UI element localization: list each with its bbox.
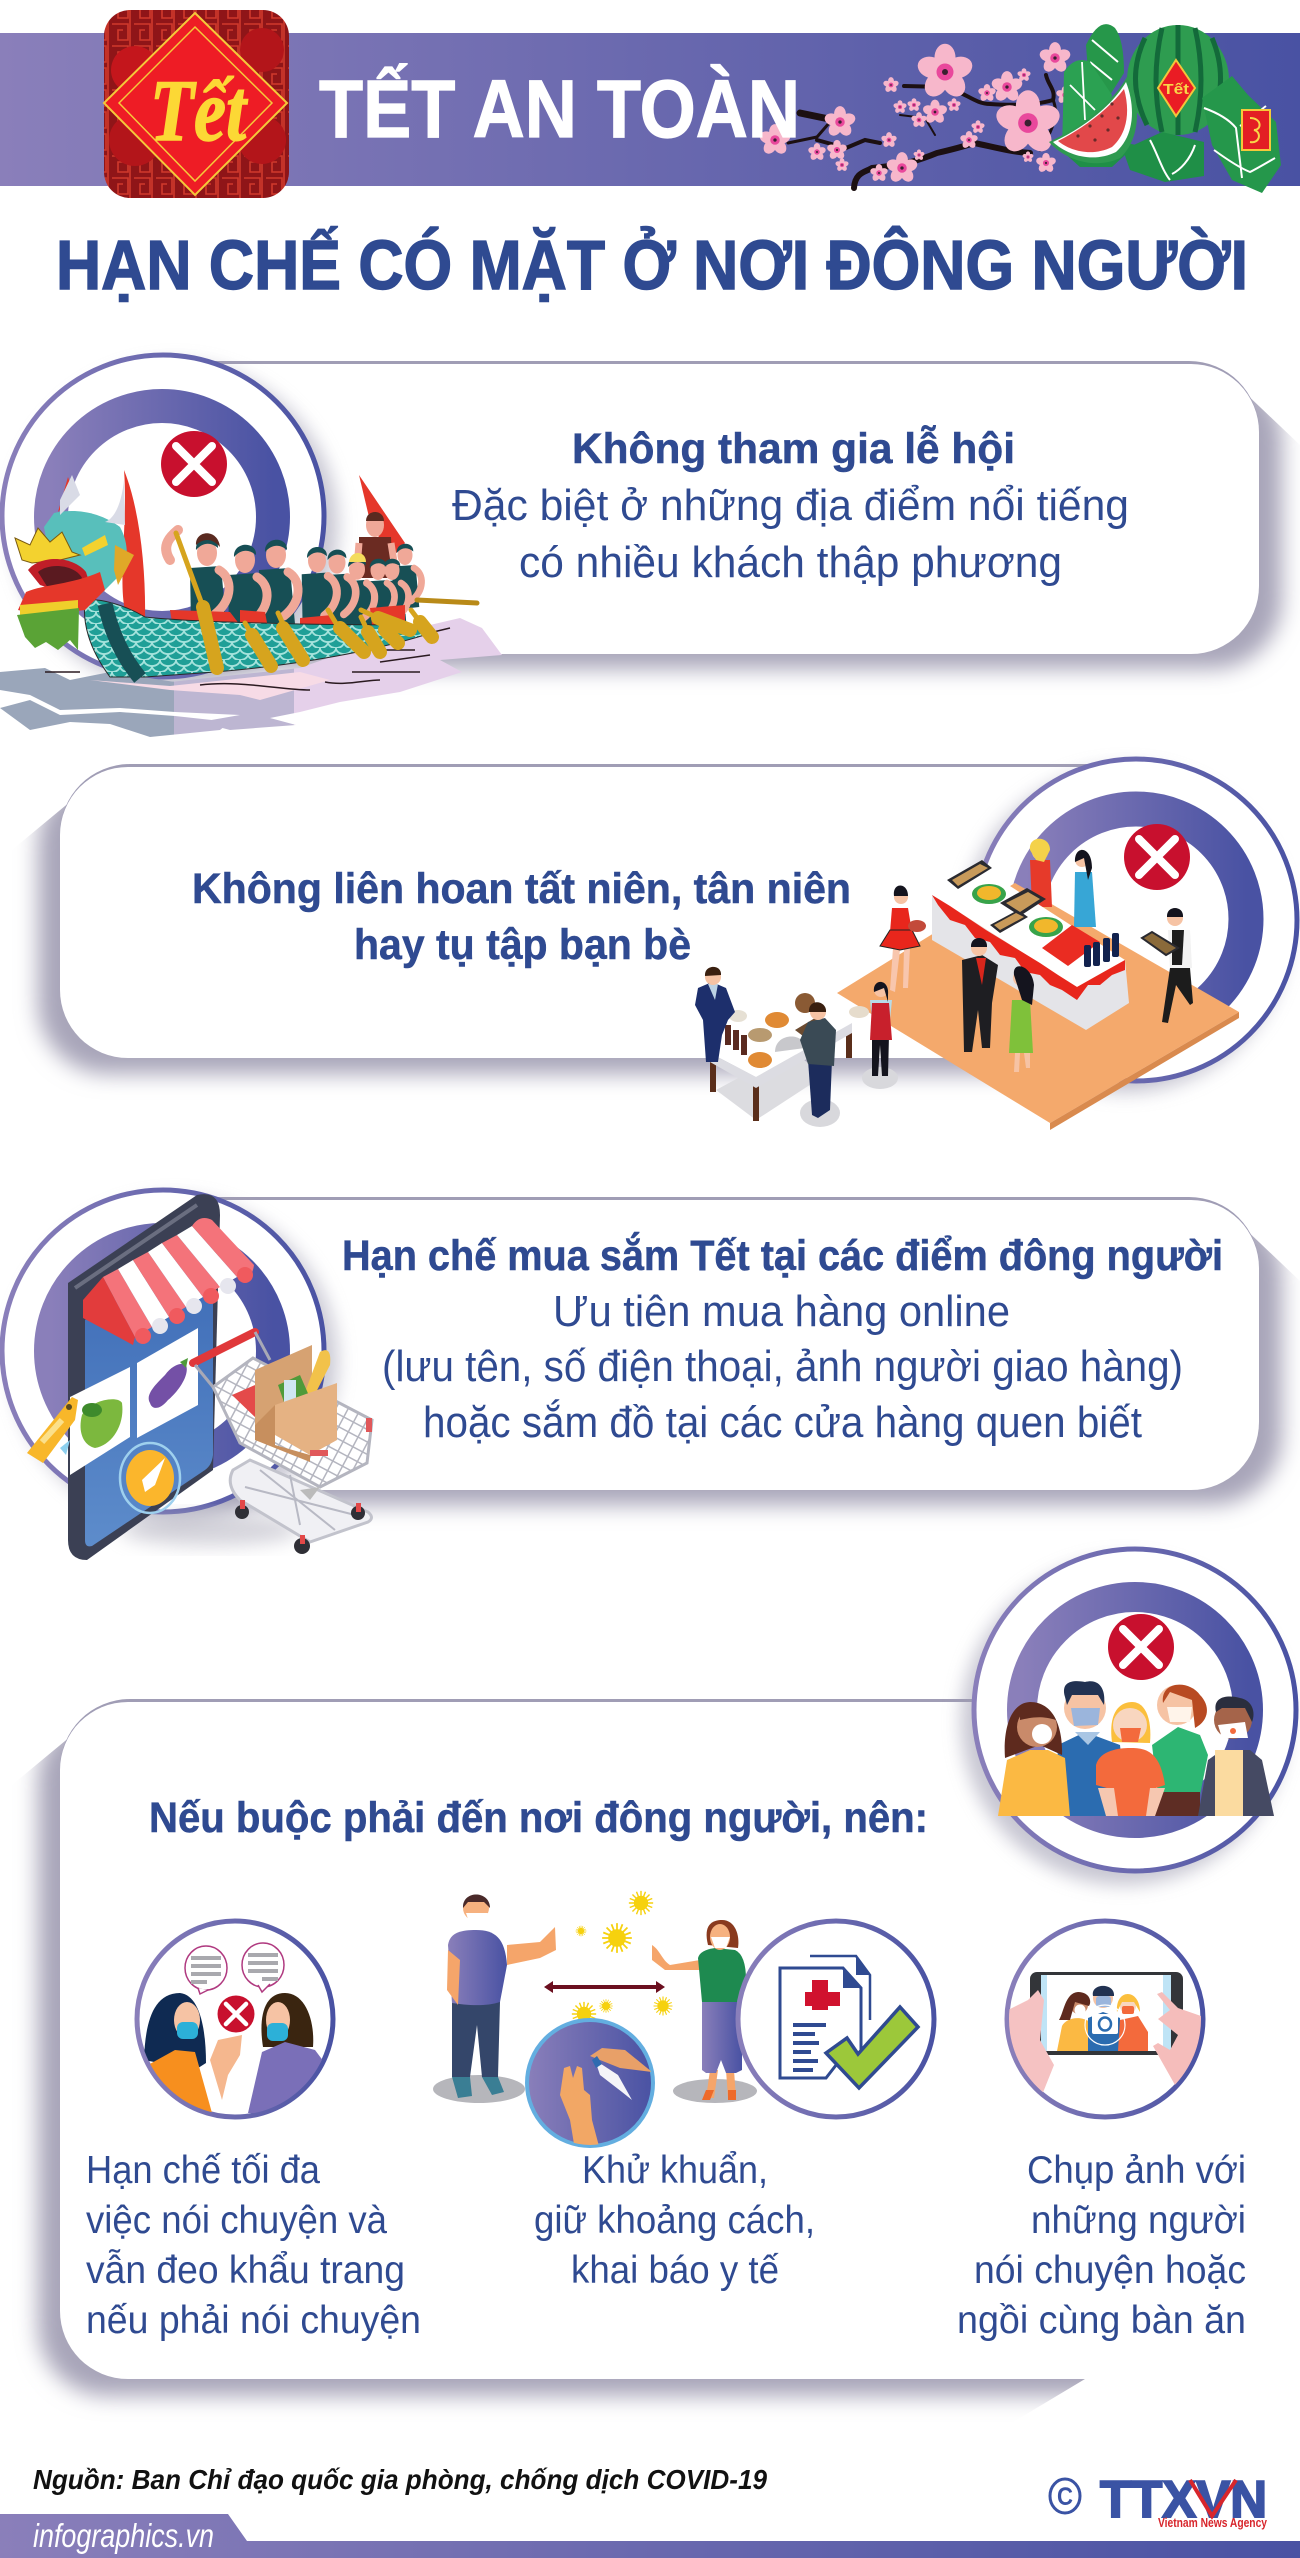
text block: no talking advice: nếu phải nói chuyện [86, 2299, 421, 2342]
illustration: woman in green dress [1009, 966, 1034, 1072]
dragon hull [84, 600, 434, 677]
icon: medical declaration [738, 1921, 934, 2117]
text block: photo advice [957, 2149, 1246, 2342]
text block: no talking advice: vẫn đeo khẩu trang [86, 2249, 405, 2292]
text block: festivals: Đặc biệt ở những địa điểm nổi tiếng [452, 481, 1129, 530]
text block: shopping: Ưu tiên mua hàng online [553, 1287, 1010, 1336]
icon: no talking [137, 1921, 333, 2117]
icon: plum blossom branch [758, 42, 1075, 188]
text block: festivals: Không tham gia lễ hội [572, 424, 1015, 473]
panel: shopping [2, 1190, 1282, 1560]
illustration: waitress [849, 982, 898, 1089]
text block: festivals [452, 424, 1129, 587]
illustration: man in black suit [962, 938, 998, 1052]
dragon head [44, 511, 127, 600]
icon: Tet lunar calendar badge: Tết [150, 63, 248, 160]
product cards [70, 1328, 198, 1475]
text block: photo advice: những người [1031, 2199, 1246, 2242]
illustration: man in navy suit [695, 967, 735, 1062]
icon: hand sanitizing [527, 2020, 653, 2150]
text block: photo advice: ngồi cùng bàn ăn [957, 2299, 1246, 2342]
text block: disinfect advice [534, 2149, 815, 2292]
banner: header band [0, 10, 1300, 198]
text block: parties: hay tụ tập bạn bè [354, 921, 691, 969]
text block: shopping: Hạn chế mua sắm Tết tại các điểm đông người [342, 1231, 1223, 1280]
panel: if you must go to crowded places [38, 1549, 1300, 2396]
text block: shopping: (lưu tên, số điện thoại, ảnh người giao hàng) [382, 1342, 1183, 1391]
speech bubbles [185, 1943, 284, 1994]
source line: Nguồn: Ban Chỉ đạo quốc gia phòng, chống dịch COVID-19 [33, 2464, 767, 2495]
website label: infographics.vn [33, 2517, 214, 2554]
text block: parties [192, 865, 851, 969]
logo: TTXVN: C [1057, 2483, 1073, 2511]
shop awning [83, 1218, 254, 1345]
illustration: woman in red dress [1030, 839, 1052, 907]
logo: TTXVN: Vietnam News Agency [1158, 2515, 1268, 2530]
document back [810, 1956, 870, 2020]
text block: shopping: hoặc sắm đồ tại các cửa hàng quen biết [423, 1398, 1142, 1447]
title: Tet an toan: TẾT AN TOÀN [319, 64, 800, 155]
text block: shopping [342, 1231, 1223, 1447]
icon: ring with X [2, 355, 338, 689]
illustration: party floor [837, 883, 1239, 1130]
illustration: waiter [1142, 908, 1193, 1023]
logo: TTXVN: TTXVN [1100, 2471, 1267, 2529]
paddles [176, 533, 477, 668]
icon: water [0, 618, 502, 737]
panel: festivals [0, 355, 1282, 737]
price tag [27, 1397, 78, 1463]
text block: no talking advice [86, 2149, 421, 2342]
icon: dragon boat [15, 470, 477, 678]
text block: disinfect advice: giữ khoảng cách, [534, 2199, 815, 2242]
person: blue sweater [1055, 1681, 1128, 1816]
text block: photo advice: Chụp ảnh với [1027, 2149, 1246, 2192]
illustration: woman keeping distance [652, 1920, 757, 2103]
person: orange shirt [1096, 1702, 1165, 1816]
arrow: distance [544, 1981, 665, 1993]
text block: photo advice: nói chuyện hoặc [974, 2249, 1246, 2292]
text block: no talking advice: Hạn chế tối đa [86, 2149, 320, 2192]
text block: festivals: có nhiều khách thập phương [519, 538, 1062, 587]
illustration: woman in blue dress [1074, 850, 1096, 927]
order button [120, 1443, 180, 1513]
icon: ring background [2, 1190, 338, 1524]
stern flag and bow fin [58, 470, 405, 620]
icon: photo of group [1007, 1921, 1204, 2117]
text block: no talking advice: việc nói chuyện và [86, 2199, 387, 2242]
document front [780, 1968, 861, 2078]
icon: ring with X [962, 759, 1297, 1093]
check mark [826, 2007, 918, 2088]
footer band [0, 2514, 1300, 2558]
person: dark jacket [1198, 1696, 1274, 1816]
panel: year-end parties [38, 759, 1297, 1130]
shopping cart [193, 1332, 372, 1554]
icon: ring with X and crowd [961, 1549, 1296, 1885]
icon: virus particles [572, 1891, 672, 2026]
illustration: phone store [27, 1194, 372, 1560]
text block: disinfect advice: Khử khuẩn, [582, 2149, 768, 2192]
icon: banh chung and watermelon [1049, 24, 1281, 193]
text block: parties: Không liên hoan tất niên, tân niên [192, 865, 851, 913]
person: green sweater [1152, 1685, 1208, 1816]
illustration: man from the back [800, 1002, 840, 1127]
text block: disinfect advice: khai báo y tế [571, 2249, 779, 2292]
icon: banh chung and watermelon: Tết [1163, 81, 1189, 98]
illustration: man keeping distance [433, 1894, 556, 2103]
person: yellow shirt [998, 1702, 1070, 1816]
illustration: banquet table [932, 860, 1129, 1030]
illustration: small food table [710, 993, 852, 1121]
heading: recommendations: Nếu buộc phải đến nơi đông người, nên: [149, 1794, 928, 1842]
illustration: woman with red skirt [880, 886, 926, 992]
icon: Tet lunar calendar badge [104, 10, 289, 198]
